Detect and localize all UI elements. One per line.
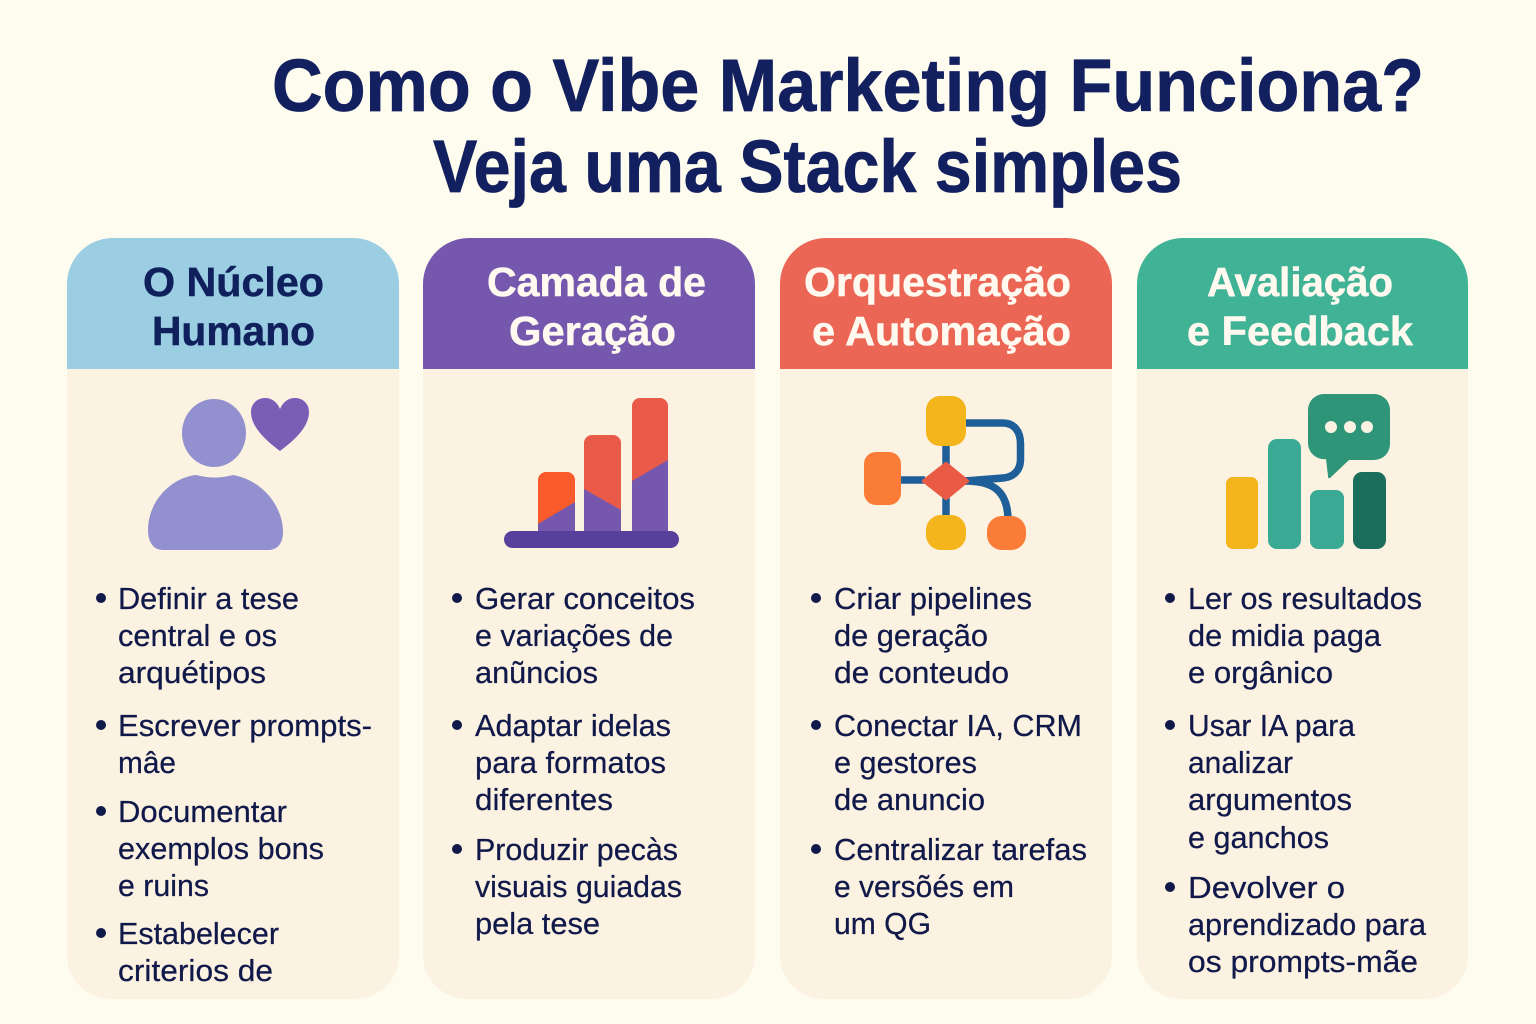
header: Camada de Geração: Geração <box>509 308 676 354</box>
panel: Orquestração e Automação <box>780 238 1112 999</box>
bullet: documentar exemplos: Documentar <box>118 794 287 829</box>
bullet: gerar conceitos: Gerar conceitos <box>475 581 695 616</box>
bullet: usar IA: analizar <box>1188 745 1293 780</box>
bullet: ler resultados: de midia paga <box>1188 618 1382 653</box>
bullet: conectar IA: Conectar IA, CRM <box>834 708 1082 743</box>
title <box>272 44 1424 208</box>
bullet: escrever prompts-mãe: Escrever prompts- <box>118 708 372 743</box>
bullet: gerar conceitos <box>452 581 695 690</box>
bullet: conectar IA: de anuncio <box>834 782 985 817</box>
bullet: conectar IA: e gestores <box>834 745 977 780</box>
header: O Núcleo Humano: Humano <box>152 308 315 354</box>
bullet: estabelecer criterios: criterios de <box>118 953 273 988</box>
header: Avaliação e Feedback: e Feedback <box>1187 308 1413 354</box>
bullet: criar pipelines <box>811 581 1032 690</box>
bullet: devolver aprendizado: aprendizado para <box>1188 907 1427 942</box>
icon: bars with speech bubble <box>1226 394 1390 549</box>
bullet: centralizar tarefas <box>811 832 1087 941</box>
bullet: devolver aprendizado <box>1165 870 1427 979</box>
header: Orquestração e Automação <box>780 238 1112 369</box>
bullet: gerar conceitos: anũncios <box>475 655 598 690</box>
header: Orquestração e Automação: e Automação <box>812 308 1071 354</box>
bullet: adaptar ideias: Adaptar idelas <box>475 708 671 743</box>
header: Avaliação e Feedback <box>1137 238 1468 369</box>
header: Camada de Geração <box>423 238 755 369</box>
bullet: adaptar ideias <box>452 708 671 817</box>
bullet: ler resultados: e orgânico <box>1188 655 1333 690</box>
header: O Núcleo Humano <box>67 238 399 369</box>
header: Orquestração e Automação: Orquestração <box>804 259 1071 305</box>
bullet: criar pipelines: de geração <box>834 618 988 653</box>
bullet: centralizar tarefas: um QG <box>834 906 931 941</box>
bullet: criar pipelines: Criar pipelines <box>834 581 1032 616</box>
panel: O Núcleo Humano <box>67 238 399 999</box>
bullet: definir a tese: central e os <box>118 618 277 653</box>
bullet: devolver aprendizado: os prompts-mãe <box>1188 944 1418 979</box>
bullet: documentar exemplos: e ruins <box>118 868 209 903</box>
header: O Núcleo Humano: O Núcleo <box>143 259 324 305</box>
bullet: criar pipelines: de conteudo <box>834 655 1009 690</box>
bullet: documentar exemplos <box>96 794 324 903</box>
panel: Camada de Geração <box>423 238 755 999</box>
bullet: produzir peças: pela tese <box>475 906 600 941</box>
bullet: definir a tese <box>96 581 299 690</box>
bullet: usar IA: argumentos <box>1188 782 1352 817</box>
bullet: adaptar ideias: para formatos <box>475 745 666 780</box>
bullet: definir a tese: Definir a tese <box>118 581 299 616</box>
bullet: adaptar ideias: diferentes <box>475 782 613 817</box>
header: Avaliação e Feedback: Avaliação <box>1207 259 1393 305</box>
bullet: estabelecer criterios: Estabelecer <box>118 916 279 951</box>
bullet: ler resultados <box>1165 581 1422 690</box>
bullet: centralizar tarefas: Centralizar tarefas <box>834 832 1087 867</box>
bullet: gerar conceitos: e variações de <box>475 618 673 653</box>
bullet: produzir peças: visuais guiadas <box>475 869 682 904</box>
bullet: usar IA <box>1165 708 1356 855</box>
bullet: definir a tese: arquétipos <box>118 655 266 690</box>
icon: person with heart <box>148 398 309 550</box>
bullet: estabelecer criterios <box>96 916 279 988</box>
bullet: devolver aprendizado: Devolver o <box>1188 870 1345 905</box>
bullet: usar IA: Usar IA para <box>1188 708 1356 743</box>
bullet: escrever prompts-mãe <box>96 708 372 780</box>
panel: Avaliação e Feedback <box>1137 238 1468 999</box>
bullet: escrever prompts-mãe: mâe <box>118 745 176 780</box>
bullet: produzir peças <box>452 832 682 941</box>
title: Como o Vibe Marketing Funciona? <box>272 44 1424 127</box>
bullet: produzir peças: Produzir pecàs <box>475 832 678 867</box>
bullet: ler resultados: Ler os resultados <box>1188 581 1422 616</box>
bullet: documentar exemplos: exemplos bons <box>118 831 324 866</box>
title: Veja uma Stack simples <box>433 125 1182 208</box>
bullet: usar IA: e ganchos <box>1188 820 1329 855</box>
header: Camada de Geração: Camada de <box>487 259 706 305</box>
bullet: conectar IA <box>811 708 1082 817</box>
icon: bar chart <box>504 398 679 548</box>
bullet: centralizar tarefas: e versõés em <box>834 869 1014 904</box>
icon: workflow diagram <box>864 396 1026 550</box>
